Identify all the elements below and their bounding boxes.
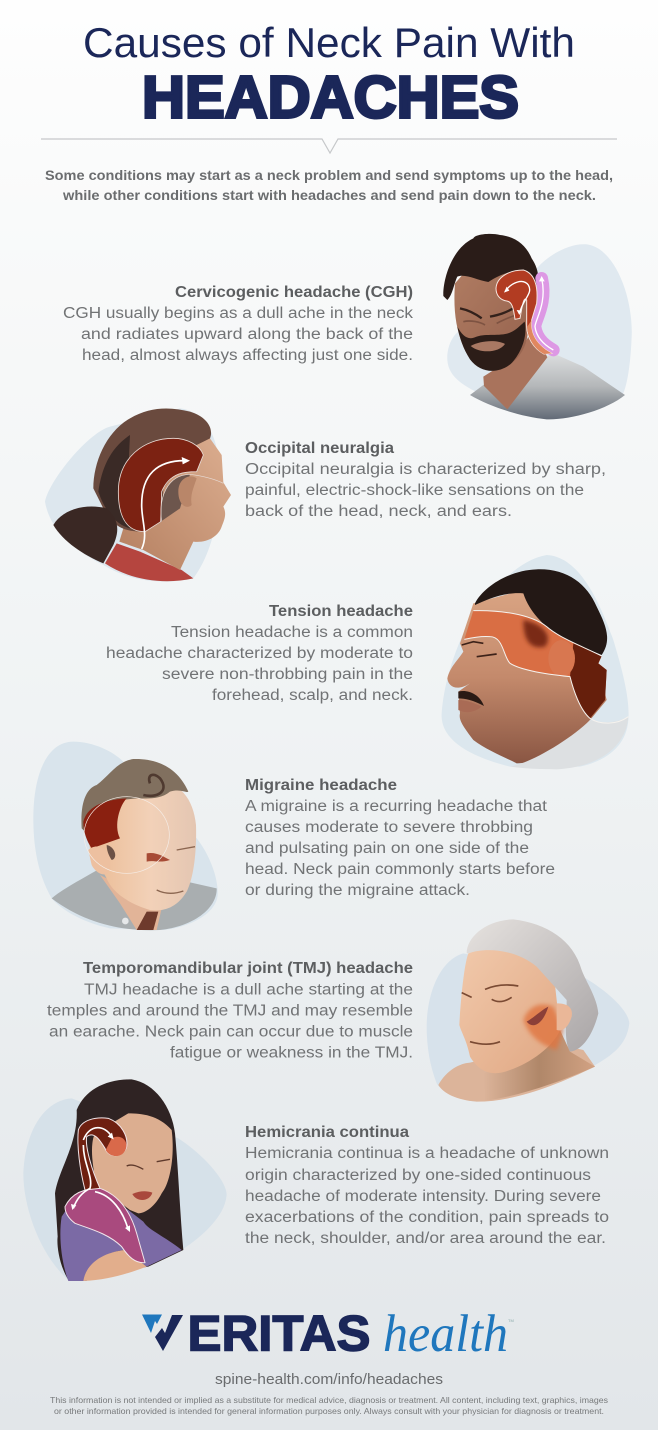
text: TMJ headache: an earache. Neck pain can occur due to muscle bbox=[49, 1024, 413, 1040]
title bbox=[83, 19, 575, 130]
text: tension headache: forehead, scalp, and neck. bbox=[212, 687, 413, 704]
text: tension headache: headache characterized by moderate to bbox=[106, 645, 413, 662]
text: cervicogenic headache: and radiates upward along the back of the bbox=[81, 326, 413, 343]
text: occipital neuralgia bbox=[245, 440, 606, 520]
website url: spine-health.com/info/headaches bbox=[215, 1371, 443, 1388]
text: migraine headache: head. Neck pain commonly starts before bbox=[245, 861, 555, 878]
text: tension headache: Tension headache is a common bbox=[171, 624, 413, 641]
text: migraine headache: and pulsating pain on one side of the bbox=[245, 840, 529, 857]
logo: Veritas Health: ERITAS bbox=[188, 1306, 370, 1362]
text: hemicrania continua bbox=[245, 1124, 609, 1247]
text: hemicrania continua: headache of moderate intensity. During severe bbox=[245, 1188, 601, 1205]
intro text: while other conditions start with headaches and send pain down to the neck. bbox=[62, 188, 596, 203]
text: migraine headache bbox=[245, 777, 555, 899]
text: TMJ headache bbox=[47, 960, 413, 1062]
text: tension headache: severe non-throbbing pain in the bbox=[162, 666, 413, 683]
text: occipital neuralgia: back of the head, neck, and ears. bbox=[245, 503, 512, 520]
text: TMJ headache: fatigue or weakness in the TMJ. bbox=[170, 1044, 413, 1062]
text: TMJ headache: temples and around the TMJ and may resemble bbox=[47, 1002, 413, 1020]
text: hemicrania continua: the neck, shoulder, and/or area around the ear. bbox=[245, 1230, 606, 1247]
text: occipital neuralgia: Occipital neuralgia bbox=[245, 440, 394, 457]
text: migraine headache: causes moderate to severe throbbing bbox=[245, 819, 533, 836]
text: migraine headache: or during the migraine attack. bbox=[245, 882, 470, 899]
illustration: occipital neuralgia woman bbox=[45, 408, 231, 582]
disclaimer: or other information provided is intended for general information purposes only. Always consult with your physician for diagnosis or treatment. bbox=[54, 1406, 604, 1416]
title: Causes of Neck Pain With bbox=[83, 19, 575, 66]
text: occipital neuralgia: Occipital neuralgia is characterized by sharp, bbox=[245, 461, 606, 478]
text: tension headache: Tension headache bbox=[269, 603, 413, 620]
text: TMJ headache: Temporomandibular joint (TMJ) headache bbox=[83, 960, 413, 977]
text: TMJ headache: TMJ headache is a dull ache starting at the bbox=[84, 982, 413, 998]
text: cervicogenic headache: head, almost always affecting just one side. bbox=[82, 347, 413, 364]
text: tension headache bbox=[106, 603, 413, 704]
disclaimer: This information is not intended or implied as a substitute for medical advice, diagnosis or treatment. All content, including text, graphics, images bbox=[50, 1395, 608, 1405]
intro text bbox=[45, 168, 613, 203]
illustration: TMJ headache woman bbox=[427, 919, 629, 1102]
illustration: hemicrania continua woman bbox=[23, 1079, 227, 1281]
text: occipital neuralgia: painful, electric-shock-like sensations on the bbox=[245, 482, 584, 499]
text: hemicrania continua: Hemicrania continua is a headache of unknown bbox=[245, 1145, 609, 1162]
disclaimer bbox=[50, 1395, 608, 1416]
text: cervicogenic headache: Cervicogenic headache (CGH) bbox=[175, 284, 413, 301]
text: cervicogenic headache bbox=[63, 284, 413, 364]
illustration: tension headache man bbox=[442, 555, 629, 769]
logo: Veritas Health bbox=[142, 1305, 514, 1363]
illustration: cervicogenic headache man bbox=[443, 234, 632, 419]
text: migraine headache: A migraine is a recurring headache that bbox=[245, 798, 548, 815]
title: HEADACHES bbox=[142, 64, 519, 130]
text: hemicrania continua: exacerbations of the condition, pain spreads to bbox=[245, 1209, 609, 1226]
intro text: Some conditions may start as a neck problem and send symptoms up to the head, bbox=[45, 168, 613, 183]
divider with chevron bbox=[41, 139, 617, 153]
logo: Veritas Health: health bbox=[383, 1305, 508, 1363]
text: cervicogenic headache: CGH usually begins as a dull ache in the neck bbox=[63, 305, 413, 322]
logo: Veritas Health: TM bbox=[508, 1318, 514, 1323]
text: hemicrania continua: origin characterized by one-sided continuous bbox=[245, 1167, 591, 1184]
text: hemicrania continua: Hemicrania continua bbox=[245, 1124, 409, 1141]
text: migraine headache: Migraine headache bbox=[245, 777, 397, 794]
illustration: migraine headache man bbox=[33, 742, 218, 930]
